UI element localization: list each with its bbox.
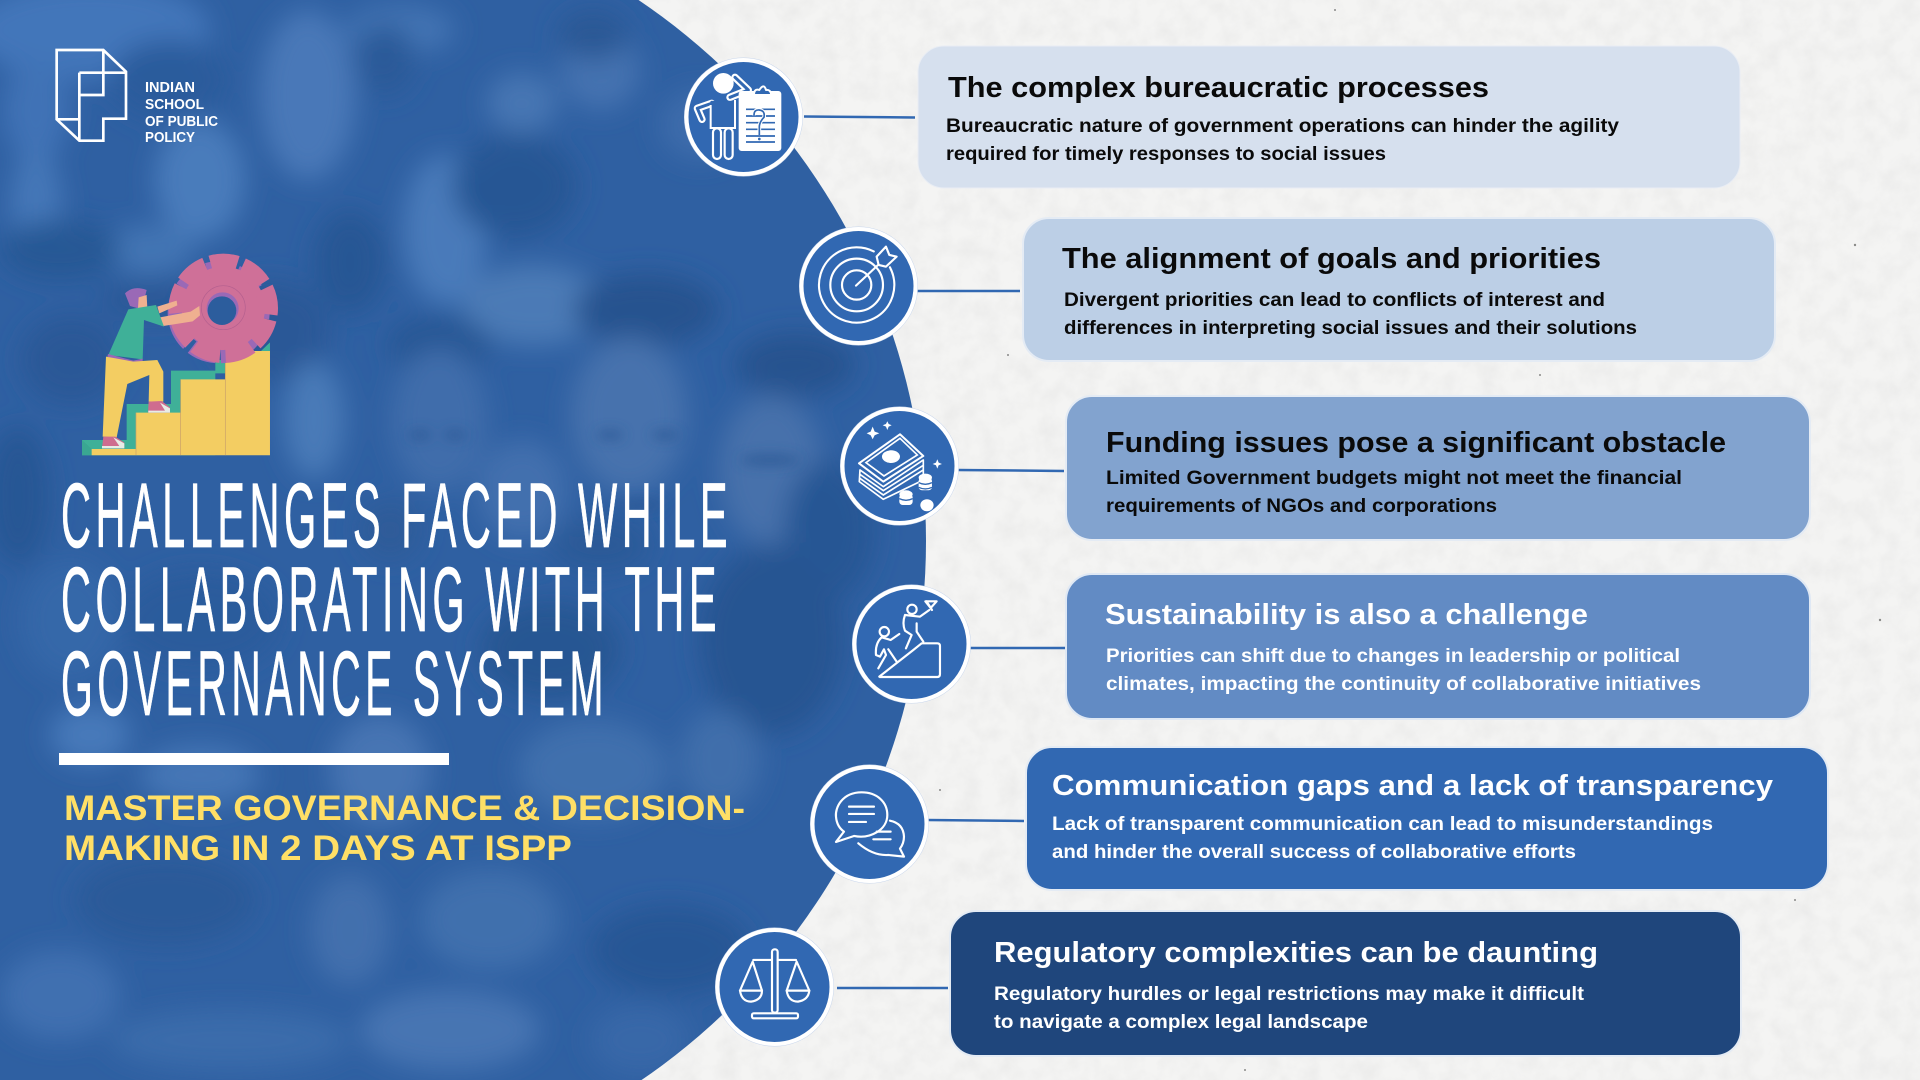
panel: bureaucratic processes card xyxy=(918,46,1740,188)
card 4 body: Priorities can shift due to changes in leadership or political xyxy=(1106,646,1680,667)
title underline bar xyxy=(59,753,449,765)
card 6 body: to navigate a complex legal landscape xyxy=(994,1012,1368,1033)
panel: goals alignment card xyxy=(1023,218,1775,361)
icon: money stack and coins xyxy=(840,406,959,526)
card 4 body xyxy=(1106,646,1701,695)
card 6 body xyxy=(994,984,1585,1033)
card 3 body xyxy=(1106,468,1682,517)
panel: crowd photo semicircle xyxy=(0,0,930,1080)
icon: target with arrow xyxy=(799,226,918,346)
connector lines xyxy=(804,116,1068,988)
card 5 body: Lack of transparent communication can lead to misunderstandings xyxy=(1052,814,1713,835)
card 4 heading: Sustainability is also a challenge xyxy=(1105,599,1588,631)
subtitle: MASTER GOVERNANCE & DECISION- xyxy=(64,789,745,828)
subtitle: MAKING IN 2 DAYS AT ISPP xyxy=(64,829,572,868)
logo wordmark: SCHOOL xyxy=(145,97,204,113)
card 3 heading: Funding issues pose a significant obstacle xyxy=(1106,427,1726,459)
logo wordmark xyxy=(145,80,218,146)
logo wordmark: OF PUBLIC xyxy=(145,114,218,130)
text: CHALLENGES FACED WHILE xyxy=(61,465,732,567)
logo wordmark: POLICY xyxy=(145,130,195,146)
panel: regulatory card xyxy=(950,911,1741,1056)
card 2 heading: The alignment of goals and priorities xyxy=(1062,243,1601,275)
panel: communication card xyxy=(1026,747,1828,890)
card 1 body: required for timely responses to social issues xyxy=(946,144,1386,165)
card 1 heading: The complex bureaucratic processes xyxy=(948,72,1489,104)
card 2 body: differences in interpreting social issues and their solutions xyxy=(1064,318,1637,339)
logo xyxy=(57,50,218,146)
text: COLLABORATING WITH THE xyxy=(61,549,721,651)
logo wordmark: INDIAN xyxy=(145,80,195,96)
panel: sustainability card xyxy=(1066,574,1810,719)
stairs xyxy=(82,342,270,455)
icon: speech bubbles xyxy=(810,764,929,884)
person xyxy=(102,288,200,448)
icon: climbers with flag xyxy=(852,584,971,704)
gear xyxy=(167,254,278,364)
card 5 heading: Communication gaps and a lack of transparency xyxy=(1052,770,1773,802)
title xyxy=(61,465,732,735)
card 3 body: Limited Government budgets might not meet the financial xyxy=(1106,468,1682,489)
card 5 body xyxy=(1052,814,1713,863)
card 4 body: climates, impacting the continuity of collaborative initiatives xyxy=(1106,674,1701,695)
subtitle xyxy=(64,789,745,868)
card 6 body: Regulatory hurdles or legal restrictions may make it difficult xyxy=(994,984,1585,1005)
card 2 body: Divergent priorities can lead to conflicts of interest and xyxy=(1064,290,1605,311)
card 6 heading: Regulatory complexities can be daunting xyxy=(994,937,1598,969)
icon: person with question clipboard xyxy=(684,58,803,176)
panel: funding card xyxy=(1066,396,1810,540)
card 2 body xyxy=(1064,290,1637,339)
card 1 body: Bureaucratic nature of government operations can hinder the agility xyxy=(946,116,1619,137)
icon: balance scales xyxy=(715,928,834,1046)
card 1 body xyxy=(946,116,1619,165)
card 3 body: requirements of NGOs and corporations xyxy=(1106,496,1497,517)
title: GOVERNANCE SYSTEM xyxy=(61,633,608,735)
logo mark xyxy=(57,50,126,141)
card 5 body: and hinder the overall success of collaborative efforts xyxy=(1052,842,1576,863)
illustration: person pushing gear up stairs xyxy=(82,254,278,455)
